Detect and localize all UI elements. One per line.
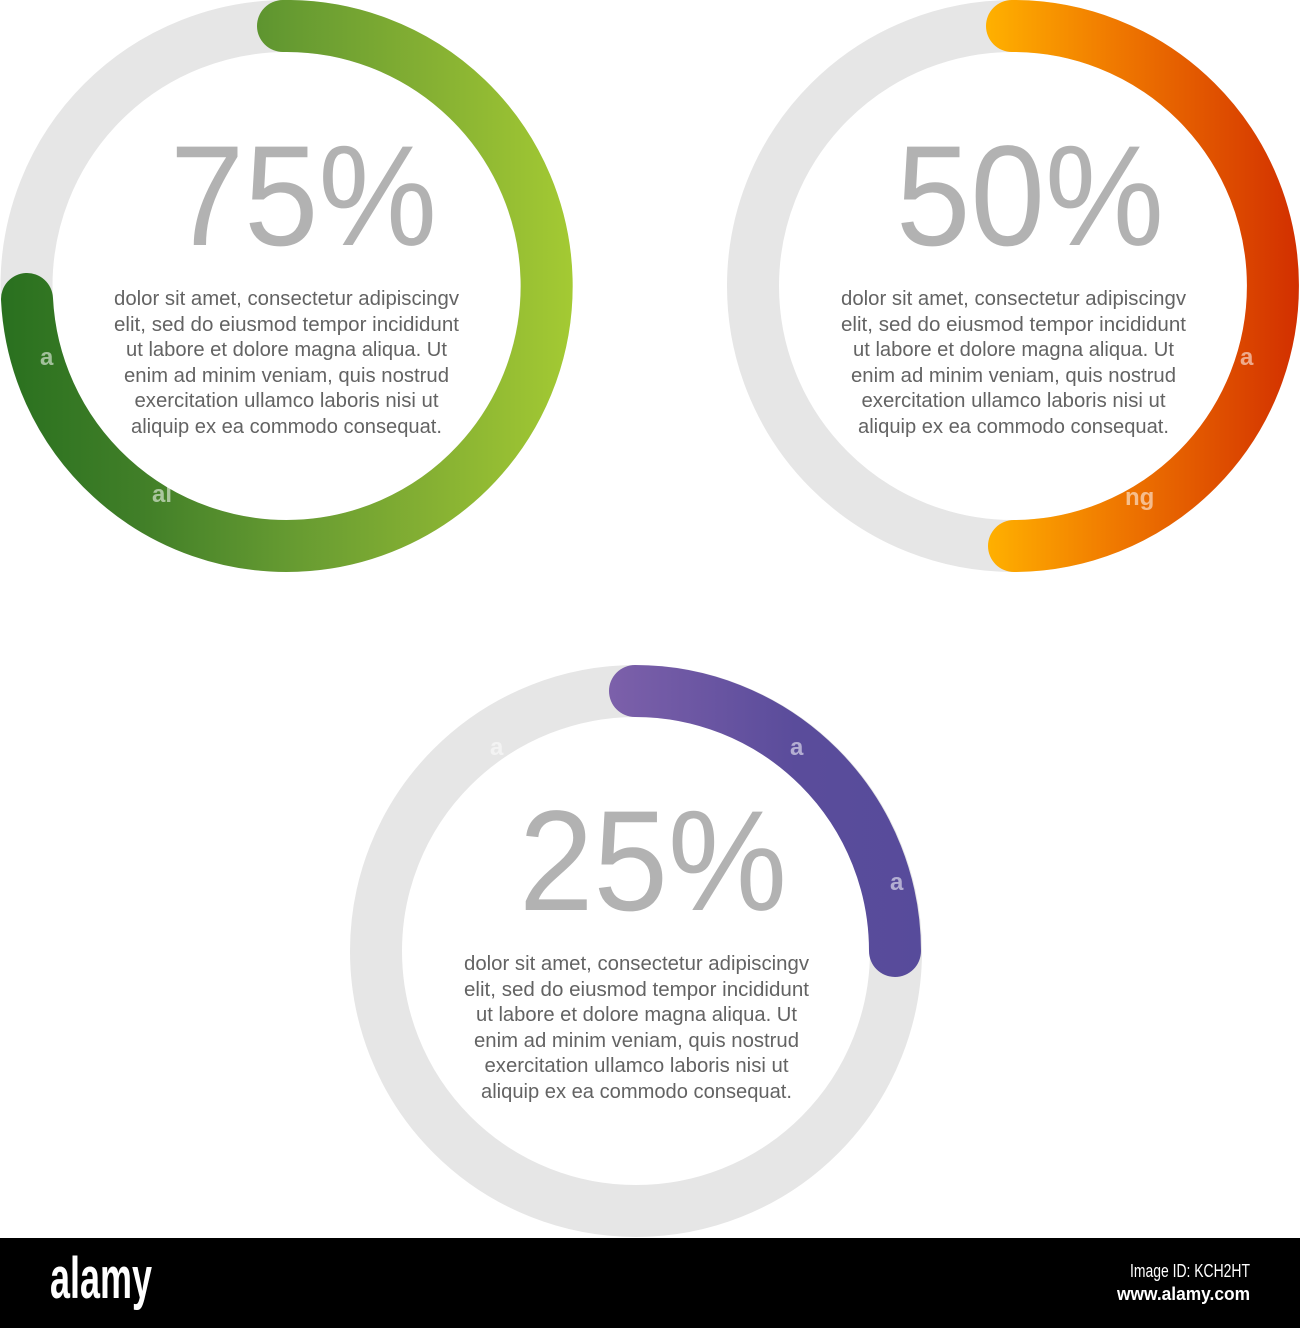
watermark fragments <box>40 344 1254 896</box>
percentage: 50%: 50% <box>896 117 1164 276</box>
footer bar <box>0 1238 1300 1328</box>
text block: 75% description <box>114 288 459 438</box>
text block: 75% description: exercitation ullamco laboris nisi ut <box>134 390 439 412</box>
logo: alamy: alamy <box>50 1246 152 1311</box>
ring track: 75% <box>26 26 546 546</box>
ring track: 25% <box>376 691 896 1211</box>
panel: 75% ring <box>26 26 547 546</box>
text block: 50% description: enim ad minim veniam, quis nostrud <box>851 365 1176 387</box>
text block: 50% description: elit, sed do eiusmod tempor incididunt <box>841 314 1186 336</box>
text block: 75% description: enim ad minim veniam, quis nostrud <box>124 365 449 387</box>
text block: 75% description: elit, sed do eiusmod tempor incididunt <box>114 314 459 336</box>
watermark fragments: a <box>1240 344 1254 371</box>
website url: www.alamy.com <box>1116 1284 1250 1304</box>
text block: 50% description: dolor sit amet, consectetur adipiscingv <box>841 288 1186 310</box>
text block: 25% description: exercitation ullamco laboris nisi ut <box>484 1055 789 1077</box>
percentage: 75%: 75% <box>170 117 437 276</box>
text block: 50% description: ut labore et dolore magna aliqua. Ut <box>853 339 1174 361</box>
text block: 50% description <box>841 288 1186 438</box>
progress arc: purple 25% <box>635 691 895 951</box>
text block: 25% description <box>464 953 809 1103</box>
image id: Image ID: KCH2HT <box>1130 1261 1250 1281</box>
watermark fragments: a <box>490 734 504 761</box>
watermark fragments: al <box>152 481 172 508</box>
watermark fragments: ng <box>1125 484 1154 511</box>
watermark fragments: a <box>790 734 804 761</box>
panel: 50% ring <box>753 26 1273 546</box>
text block: 75% description: ut labore et dolore magna aliqua. Ut <box>126 339 447 361</box>
watermark fragments: a <box>890 869 904 896</box>
ring track: 50% <box>753 26 1273 546</box>
progress arc: green 75% <box>27 26 547 546</box>
text block: 25% description: aliquip ex ea commodo consequat. <box>481 1081 792 1103</box>
text block: 50% description: aliquip ex ea commodo consequat. <box>858 416 1169 438</box>
text block: 50% description: exercitation ullamco laboris nisi ut <box>862 390 1166 412</box>
watermark fragments: a <box>40 344 54 371</box>
text block: 75% description: aliquip ex ea commodo consequat. <box>131 416 442 438</box>
text block: 25% description: ut labore et dolore magna aliqua. Ut <box>476 1004 797 1026</box>
percentage: 25%: 25% <box>519 782 787 941</box>
text block: 25% description: elit, sed do eiusmod tempor incididunt <box>464 979 809 1001</box>
panel: 25% ring <box>376 691 896 1211</box>
text block: 25% description: enim ad minim veniam, quis nostrud <box>474 1030 799 1052</box>
text block: 75% description: dolor sit amet, consectetur adipiscingv <box>114 288 459 310</box>
text block: 25% description: dolor sit amet, consectetur adipiscingv <box>464 953 809 975</box>
progress arc: orange 50% <box>1012 26 1273 546</box>
